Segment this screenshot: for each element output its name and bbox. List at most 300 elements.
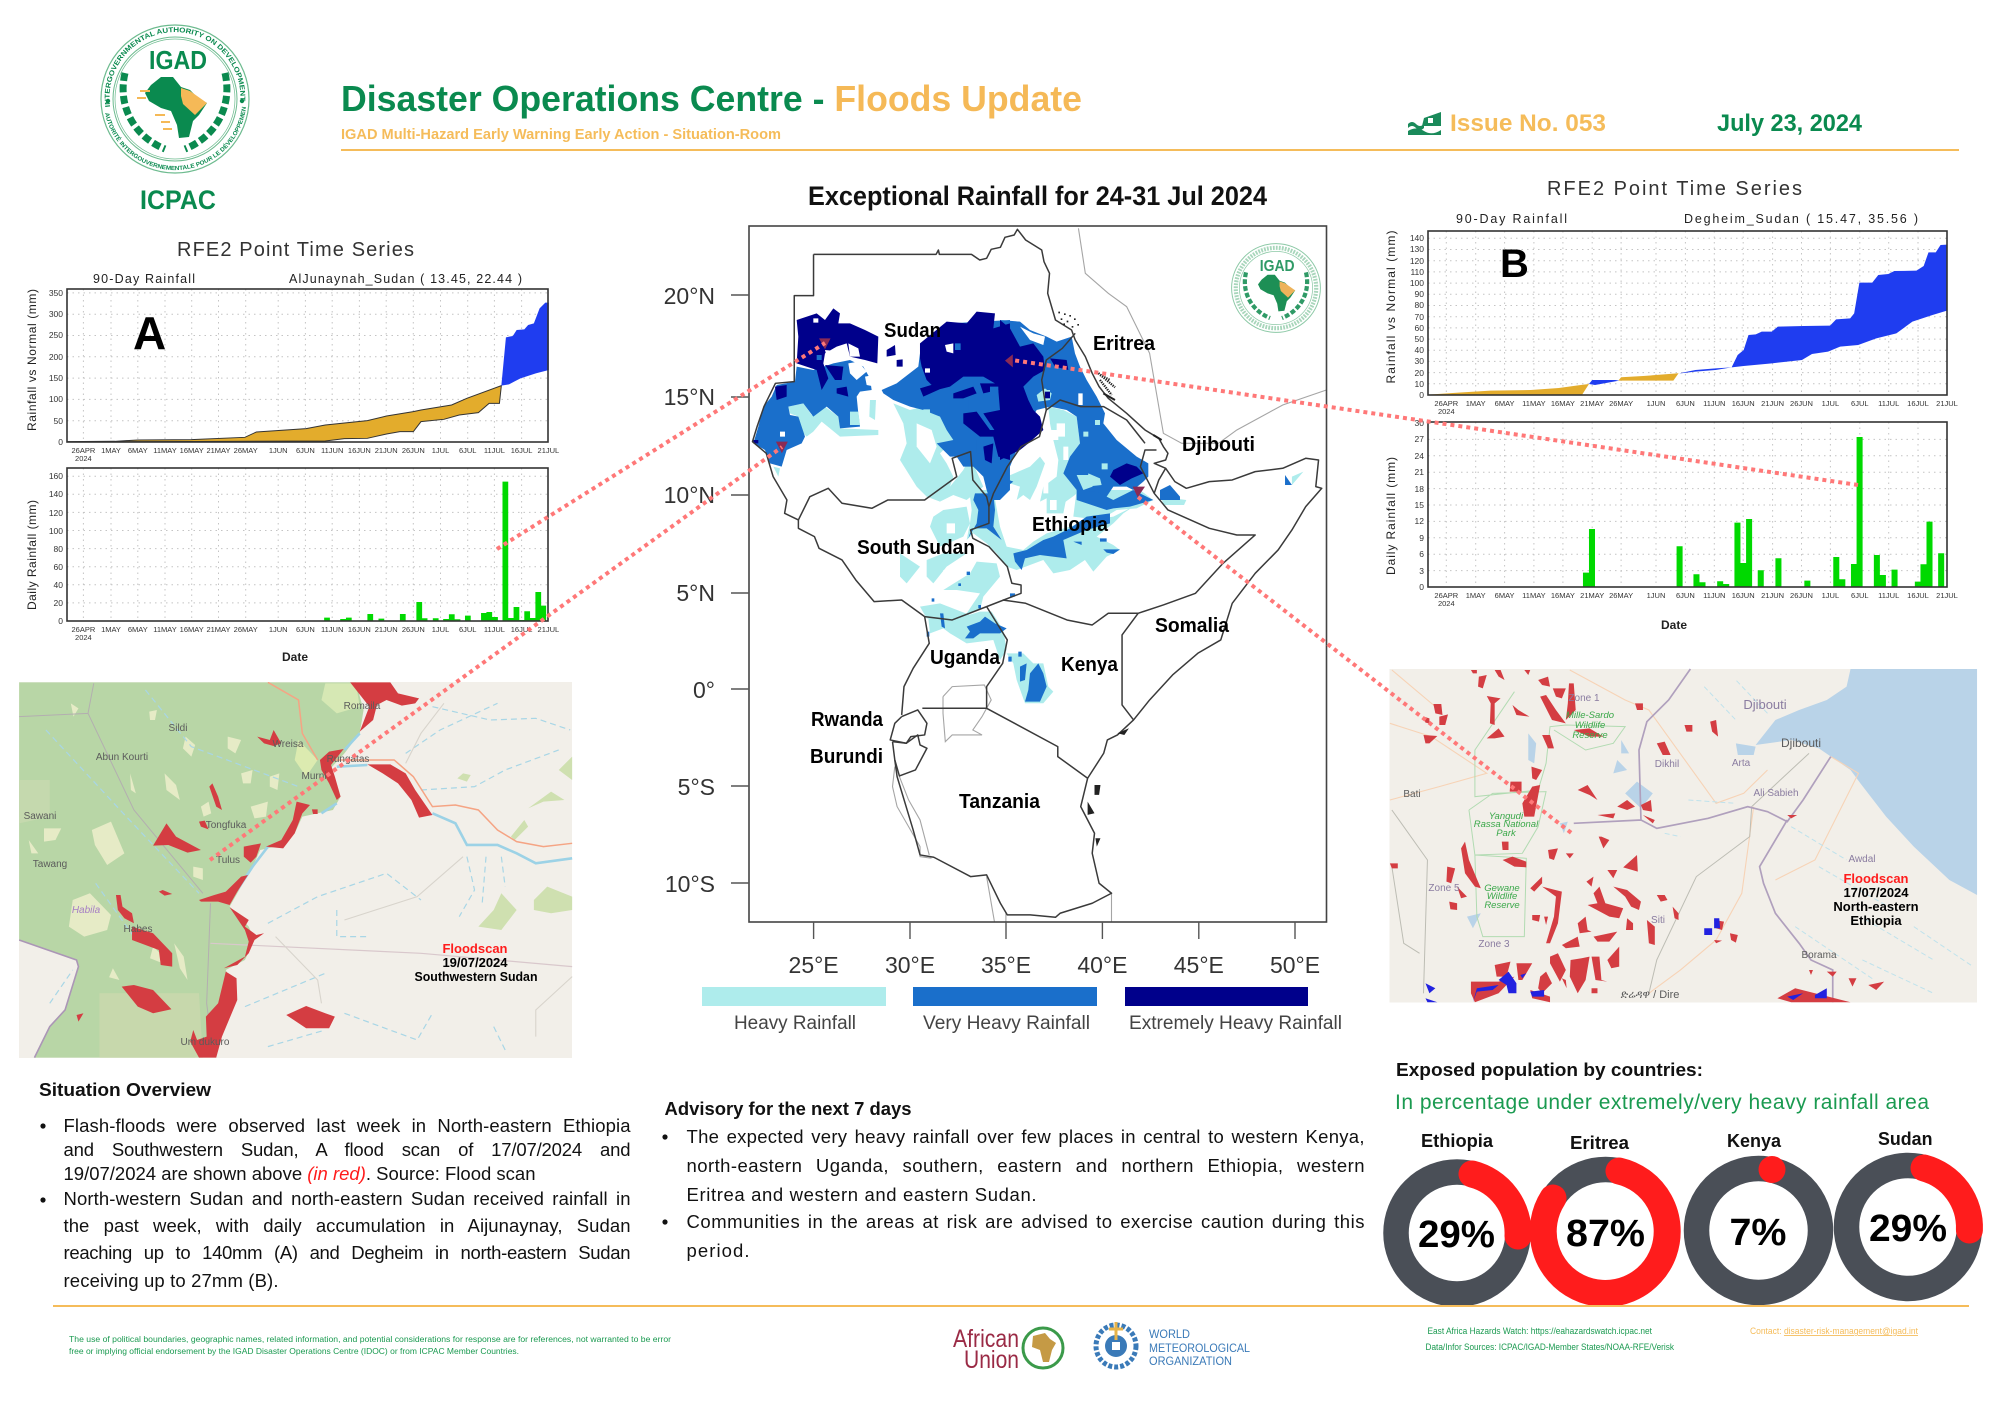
ring text: INTERGOVERNMENTAL AUTHORITY ON DEVELOPMENT xyxy=(104,27,246,107)
footer sources: East Africa Hazards Watch: https://eahazardswatch.icpac.net xyxy=(1428,1326,1653,1336)
chart B subtitle right: Degheim_Sudan ( 15.47, 35.56 ) xyxy=(1684,212,1918,226)
chart A y labels: 300 xyxy=(49,309,63,319)
country labels: Kenya xyxy=(1061,654,1119,676)
chart B x labels: 21JUL xyxy=(1936,399,1958,408)
title: Disaster Operations Centre - Floods Update xyxy=(341,78,1082,119)
text block: advisory: period. xyxy=(686,1240,750,1261)
place labels: Wildlife xyxy=(1575,720,1605,731)
chart A2 y labels: 100 xyxy=(49,526,63,536)
chart A x labels: 6JUL xyxy=(459,446,476,455)
legend: heavy rainfall: Heavy Rainfall xyxy=(734,1013,856,1034)
legend: heavy rainfall xyxy=(702,987,886,1034)
text block: advisory xyxy=(662,1126,1364,1261)
chart B x labels: 11JUL xyxy=(1878,399,1899,408)
chart A date label: Date xyxy=(282,650,308,664)
icon: flood house xyxy=(1408,112,1441,135)
logo: African Union: Union xyxy=(964,1346,1019,1374)
small IGAD logo xyxy=(1232,244,1320,332)
place labels: Siti xyxy=(1651,915,1665,926)
chart A2 x labels: 6JUN xyxy=(296,625,315,634)
chart B y labels: 50 xyxy=(1415,334,1424,344)
flood map B caption xyxy=(1833,871,1919,928)
chart A cumulative areas xyxy=(67,303,549,442)
text block: situation overview: the past week, with daily accumulation in Aijunaynay, Sudan xyxy=(64,1215,630,1236)
chart B x labels: 16MAY xyxy=(1551,399,1575,408)
ICPAC label: ICPAC xyxy=(140,185,216,215)
chart B2 x labels: 16JUN xyxy=(1732,591,1755,600)
text block: situation overview: receiving up to 27mm (B). xyxy=(64,1270,278,1291)
chart A title: RFE2 Point Time Series xyxy=(177,239,414,261)
text block: advisory: north-eastern Uganda, southern, eastern and northern Ethiopia, western xyxy=(686,1155,1364,1176)
place labels: Habila xyxy=(72,905,101,916)
flood map A caption: Southwestern Sudan xyxy=(414,969,538,984)
latitude labels xyxy=(664,283,715,897)
text block: situation overview: 19/07/2024 are shown above (in red). Source: Flood scan xyxy=(64,1163,536,1184)
place labels: Ali Sabieh xyxy=(1753,788,1799,799)
rivers xyxy=(46,690,570,1050)
chart A x labels: 1JUL xyxy=(432,446,449,455)
small IGAD logo: IGAD xyxy=(1260,258,1295,275)
chart B y labels: 110 xyxy=(1410,267,1424,277)
chart B2 y labels: 21 xyxy=(1415,467,1424,477)
chart B2 x labels: 26JUN xyxy=(1790,591,1813,600)
flood map B caption: North-eastern xyxy=(1833,899,1919,914)
chart B2 y labels: 6 xyxy=(1419,549,1424,559)
roads and borders xyxy=(268,682,572,847)
country labels: Eritrea xyxy=(1093,333,1156,355)
donut: Kenya xyxy=(1696,1130,1820,1292)
place labels: Borama xyxy=(1801,950,1837,961)
chart B2 x labels: 16MAY xyxy=(1551,591,1575,600)
chart B2 x labels xyxy=(1434,591,1958,608)
text block: situation overview: and Southwestern Sudan, A flood scan of 17/07/2024 and xyxy=(64,1139,630,1160)
chart A x labels: 21MAY xyxy=(206,446,231,455)
chart B2 x labels: 6JUN xyxy=(1676,591,1695,600)
disclaimer: free or implying official endorsement by the IGAD Disaster Operations Centre (IDOC) or from ICPAC Member Countries. xyxy=(69,1346,519,1356)
chart A2 y labels: 120 xyxy=(49,508,63,518)
longitude labels: 35°E xyxy=(981,952,1031,978)
chart B x labels: 1JUL xyxy=(1822,399,1839,408)
country labels: Somalia xyxy=(1155,615,1230,637)
chart B y labels: 0 xyxy=(1419,390,1424,400)
chart A y labels: 150 xyxy=(49,373,63,383)
place labels: Wreisa xyxy=(273,739,304,750)
place labels xyxy=(1403,693,1876,1001)
place labels: Wildlife xyxy=(1487,891,1517,902)
text block: advisory: Communities in the areas at risk are advised to exercise caution during this xyxy=(686,1211,1364,1232)
latitude labels: 0° xyxy=(693,677,715,703)
flood map B caption: Ethiopia xyxy=(1850,913,1902,928)
chart B cumulative areas xyxy=(1428,245,1947,395)
chart A y labels: 0 xyxy=(58,437,63,447)
chart A2 x labels: 2024 xyxy=(75,633,92,642)
chart B y labels: 120 xyxy=(1410,256,1424,266)
chart A y labels: 250 xyxy=(49,330,63,340)
chart B x labels: 26MAY xyxy=(1609,399,1633,408)
place labels: Zone 3 xyxy=(1478,939,1510,950)
arrow: chart B to Sudan marker xyxy=(1012,360,1858,485)
chart A subtitle left: 90-Day Rainfall xyxy=(93,272,195,286)
subheading: exposed population: In percentage under extremely/very heavy rainfall area xyxy=(1395,1091,1929,1114)
rainfall: extremely heavy layer xyxy=(753,308,1143,485)
chart B subtitle left: 90-Day Rainfall xyxy=(1456,212,1567,226)
chart A x labels: 21JUN xyxy=(375,446,398,455)
country labels: Tanzania xyxy=(959,791,1041,813)
chart B x labels xyxy=(1434,399,1958,416)
chart A2 x labels: 11JUN xyxy=(321,625,343,634)
place labels: Tongfuka xyxy=(206,820,247,831)
place labels: Park xyxy=(1496,828,1517,839)
chart B x labels: 16JUL xyxy=(1907,399,1929,408)
chart A y labels: 100 xyxy=(49,394,63,404)
heading: exposed population: Exposed population by countries: xyxy=(1396,1059,1703,1080)
logo: WMO: WORLD xyxy=(1149,1329,1190,1341)
country labels: Sudan xyxy=(884,320,941,342)
place labels: Habes xyxy=(124,924,152,935)
chart B2 y labels: 24 xyxy=(1415,451,1424,461)
chart A x labels: 16JUN xyxy=(348,446,371,455)
chart B daily bars xyxy=(1583,437,1944,587)
chart A x labels: 6JUN xyxy=(296,446,315,455)
chart B2 y labels xyxy=(1415,418,1424,592)
chart A x labels: 26MAY xyxy=(234,446,258,455)
panel: flood map north-eastern Ethiopia xyxy=(1390,669,1977,1002)
chart B2 x labels: 26MAY xyxy=(1609,591,1633,600)
chart A x labels: 16MAY xyxy=(180,446,204,455)
flood map A caption xyxy=(414,941,538,984)
rainfall: white gaps in heavy layer xyxy=(917,423,1068,580)
text block: situation overview: North-western Sudan and north-eastern Sudan received rainfall in xyxy=(64,1188,630,1209)
chart A x labels xyxy=(72,446,559,463)
chart A2 y labels: 80 xyxy=(54,544,63,554)
rainfall: very heavy layer xyxy=(753,320,1292,702)
chart A x labels: 11JUL xyxy=(484,446,505,455)
chart B x labels: 6MAY xyxy=(1495,399,1515,408)
country labels: Ethiopia xyxy=(1032,514,1109,536)
place labels: Abun Kourti xyxy=(96,752,148,763)
place labels: Um dukuro xyxy=(181,1037,230,1048)
longitude labels: 40°E xyxy=(1077,952,1127,978)
country labels: Uganda xyxy=(930,647,1001,669)
place labels: Awdal xyxy=(1848,854,1876,865)
flood map A caption: Floodscan xyxy=(442,941,508,956)
arrow: flood map A to Sudan marker xyxy=(210,447,782,860)
chart A2 x labels: 16JUN xyxy=(348,625,371,634)
chart A2 x labels: 1MAY xyxy=(101,625,121,634)
chart B y labels: 90 xyxy=(1415,289,1424,299)
place labels: Reserve xyxy=(1484,900,1520,911)
chart B x labels: 11JUN xyxy=(1703,399,1725,408)
chart A2 x labels: 26JUN xyxy=(402,625,425,634)
legend: extremely heavy rainfall: Extremely Heavy Rainfall xyxy=(1129,1013,1342,1034)
chart B2 x labels: 16JUL xyxy=(1907,591,1929,600)
text block: advisory: The expected very heavy rainfall over few places in central to western Kenya, xyxy=(686,1126,1364,1147)
footer sources: Data/Infor Sources: ICPAC/IGAD-Member States/NOAA-RFE/Verisk xyxy=(1426,1342,1675,1352)
arrow: Ethiopia marker to flood map B xyxy=(1138,497,1574,835)
country labels: South Sudan xyxy=(857,537,975,559)
footer contact: Contact: disaster-risk-management@igad.int xyxy=(1750,1326,1919,1336)
disclaimer xyxy=(69,1334,671,1356)
country labels xyxy=(810,320,1255,813)
map title: Exceptional Rainfall for 24-31 Jul 2024 xyxy=(808,181,1267,211)
chart B date label: Date xyxy=(1661,618,1687,632)
chart B2 x labels: 21JUL xyxy=(1936,591,1958,600)
chart A2 y labels: 40 xyxy=(54,580,63,590)
chart B y labels: 30 xyxy=(1415,356,1424,366)
country labels: Rwanda xyxy=(811,709,884,731)
longitude labels: 30°E xyxy=(885,952,935,978)
donut: Ethiopia: 29% xyxy=(1418,1214,1495,1256)
chart A2 x labels: 1JUN xyxy=(269,625,288,634)
chart B2 y labels: 3 xyxy=(1419,566,1424,576)
chart A2 x labels: 26APR xyxy=(72,625,96,634)
chart A2 x labels: 21JUN xyxy=(375,625,398,634)
chart A2 x labels: 1JUL xyxy=(432,625,449,634)
chart B2 y labels: 18 xyxy=(1415,484,1424,494)
arrow: chart A to Sudan marker xyxy=(497,343,825,549)
logo: African Union xyxy=(953,1325,1063,1374)
chart B x labels: 11MAY xyxy=(1522,399,1546,408)
chart A2 y labels: 160 xyxy=(49,471,63,481)
latitude labels: 5°N xyxy=(676,580,715,606)
chart B x labels: 21JUN xyxy=(1761,399,1784,408)
place labels: Yangudi xyxy=(1489,811,1524,822)
chart B y labels: 20 xyxy=(1415,368,1424,378)
chart B2 x labels: 11MAY xyxy=(1522,591,1546,600)
chart B2 x labels: 11JUL xyxy=(1878,591,1899,600)
chart B2 y labels: 12 xyxy=(1415,516,1424,526)
place labels: Gewane xyxy=(1484,883,1520,894)
longitude labels: 25°E xyxy=(789,952,839,978)
heading: advisory: Advisory for the next 7 days xyxy=(664,1098,912,1119)
chart A x labels: 26JUN xyxy=(402,446,425,455)
chart A2 x labels: 16JUL xyxy=(511,625,532,634)
chart B y labels: 10 xyxy=(1415,379,1424,389)
rainfall: heavy layer xyxy=(773,388,1303,703)
chart A2 y labels: 20 xyxy=(54,598,63,608)
legend: very heavy rainfall xyxy=(913,987,1097,1034)
place labels: Dikhil xyxy=(1655,759,1679,770)
chart A2 y labels: 140 xyxy=(49,489,63,499)
chart B x labels: 2024 xyxy=(1438,407,1455,416)
flood extent xyxy=(1390,670,1894,1002)
chart A daily bars xyxy=(297,482,546,621)
chart B x labels: 6JUN xyxy=(1676,399,1695,408)
text block: situation overview xyxy=(40,1115,631,1291)
chart B x labels: 1MAY xyxy=(1466,399,1486,408)
logo: WMO xyxy=(1096,1322,1251,1368)
map ticks xyxy=(731,295,1295,939)
chart B y title: Rainfall vs Normal (mm) xyxy=(1384,230,1398,384)
chart B y labels: 60 xyxy=(1415,323,1424,333)
chart A y labels: 200 xyxy=(49,352,63,362)
donut: Sudan: 29% xyxy=(1869,1208,1947,1250)
chart B x labels: 26APR xyxy=(1434,399,1459,408)
flood extent xyxy=(77,682,432,1058)
place labels: ድሬዳዋ / Dire xyxy=(1621,989,1679,1001)
chart A2 x labels xyxy=(72,625,559,642)
chart A x labels: 26APR xyxy=(72,446,96,455)
footer sources xyxy=(1426,1326,1675,1352)
heading: situation overview: Situation Overview xyxy=(39,1079,212,1100)
chart A x labels: 11JUN xyxy=(321,446,343,455)
chart B x labels: 21MAY xyxy=(1580,399,1604,408)
chart A y title: Rainfall vs Normal (mm) xyxy=(25,289,39,431)
chart B x labels: 1JUN xyxy=(1647,399,1665,408)
logo: WMO: ORGANIZATION xyxy=(1149,1356,1232,1368)
flood map B caption: Floodscan xyxy=(1843,871,1909,886)
logo: WMO: METEOROLOGICAL xyxy=(1149,1343,1251,1355)
place labels: Djibouti xyxy=(1743,697,1787,712)
chart B x labels: 16JUN xyxy=(1732,399,1755,408)
IGAD logo: IGAD xyxy=(149,45,207,75)
chart B x labels: 26JUN xyxy=(1790,399,1813,408)
place labels: Tawang xyxy=(33,859,67,870)
place labels: Mille-Sardo xyxy=(1566,710,1614,721)
chart A y labels: 350 xyxy=(49,288,63,298)
place labels: Romaila xyxy=(344,701,381,712)
chart A2 x labels: 21JUL xyxy=(538,625,559,634)
chart A x labels: 1MAY xyxy=(101,446,121,455)
panel: chart B xyxy=(1384,178,1958,632)
panel: flood map southwestern Sudan xyxy=(19,682,572,1058)
chart A2 x labels: 11MAY xyxy=(153,625,177,634)
place labels: Arta xyxy=(1732,758,1751,769)
place labels: Reserve xyxy=(1572,730,1608,741)
chart B2 x labels: 6JUL xyxy=(1851,591,1869,600)
chart B2 x labels: 21JUN xyxy=(1761,591,1784,600)
donut: Ethiopia: Ethiopia xyxy=(1421,1130,1494,1151)
place labels: Sildi xyxy=(169,723,187,734)
chart B2 x labels: 1JUN xyxy=(1647,591,1665,600)
chart B2 y title: Daily Rainfall (mm) xyxy=(1384,457,1398,575)
panel: rainfall map xyxy=(664,226,1342,1034)
country borders xyxy=(752,228,1326,922)
chart A2 y labels xyxy=(49,471,63,626)
chart A x labels: 1JUN xyxy=(269,446,288,455)
chart A2 y title: Daily Rainfall (mm) xyxy=(25,500,39,610)
place labels: Zone 1 xyxy=(1568,693,1600,704)
flood map A caption: 19/07/2024 xyxy=(442,955,508,970)
chart A2 y labels: 0 xyxy=(58,616,63,626)
place labels: Sawani xyxy=(24,811,56,822)
chart B2 y labels: 30 xyxy=(1415,418,1424,428)
longitude labels: 45°E xyxy=(1174,952,1224,978)
chart B y labels: 80 xyxy=(1415,300,1424,310)
chart A2 y labels: 60 xyxy=(54,562,63,572)
IGAD logo xyxy=(100,24,250,174)
latitude labels: 5°S xyxy=(678,774,715,800)
chart B y labels: 140 xyxy=(1410,233,1424,243)
chart A letter: A xyxy=(133,307,166,359)
place labels: Djibouti xyxy=(1781,736,1821,750)
issue number: Issue No. 053 xyxy=(1450,110,1606,137)
chart A x labels: 2024 xyxy=(75,454,92,463)
chart B2 x labels: 1MAY xyxy=(1466,591,1486,600)
place labels: Rungatas xyxy=(327,754,369,765)
subtitle: IGAD Multi-Hazard Early Warning Early Action - Situation-Room xyxy=(341,127,781,143)
donut: Kenya: 7% xyxy=(1730,1212,1786,1254)
chart B x labels: 6JUL xyxy=(1851,399,1869,408)
date: July 23, 2024 xyxy=(1717,110,1863,137)
disclaimer: The use of political boundaries, geographic names, related information, and potential considerations for response are for references, not warranted to be error xyxy=(69,1334,671,1344)
latitude labels: 10°S xyxy=(665,871,715,897)
chart B y labels: 130 xyxy=(1410,244,1424,254)
donut: Eritrea: 87% xyxy=(1566,1213,1645,1255)
chart B y labels xyxy=(1410,233,1424,400)
text block: advisory: Eritrea and western and eastern Sudan. xyxy=(686,1184,1036,1205)
chart B2 x labels: 11JUN xyxy=(1703,591,1725,600)
chart B2 x labels: 21MAY xyxy=(1580,591,1604,600)
place labels: Murni xyxy=(301,771,327,782)
legend: very heavy rainfall: Very Heavy Rainfall xyxy=(923,1013,1090,1034)
chart A2 x labels: 6JUL xyxy=(459,625,476,634)
place labels: Tulus xyxy=(216,855,240,866)
chart B title: RFE2 Point Time Series xyxy=(1547,178,1802,200)
latitude labels: 20°N xyxy=(664,283,715,309)
donut: Eritrea: Eritrea xyxy=(1570,1132,1630,1153)
text block: situation overview: reaching up to 140mm (A) and Degheim in north-eastern Sudan xyxy=(64,1242,630,1263)
chart B2 x labels: 26APR xyxy=(1434,591,1459,600)
panel: chart A xyxy=(25,239,559,664)
chart A y labels: 50 xyxy=(54,416,63,426)
chart B2 y labels: 27 xyxy=(1415,434,1424,444)
place labels xyxy=(24,701,381,1048)
chart A x labels: 21JUL xyxy=(538,446,559,455)
place labels: Zone 5 xyxy=(1428,883,1460,894)
chart B y labels: 40 xyxy=(1415,345,1424,355)
latitude labels: 15°N xyxy=(664,384,715,410)
donut: Sudan: Sudan xyxy=(1878,1128,1932,1149)
longitude labels xyxy=(789,952,1320,978)
chart B y labels: 100 xyxy=(1410,278,1424,288)
chart A x labels: 11MAY xyxy=(153,446,177,455)
legend: extremely heavy rainfall xyxy=(1125,987,1342,1034)
islands in the Red Sea xyxy=(1058,312,1162,440)
country labels: Djibouti xyxy=(1182,434,1255,456)
red markers xyxy=(776,338,1145,497)
chart A x labels: 16JUL xyxy=(511,446,532,455)
chart B2 x labels: 2024 xyxy=(1438,599,1455,608)
logo: African Union: African xyxy=(953,1325,1019,1353)
rainfall: blocky holes xyxy=(780,318,1108,490)
chart B2 x labels: 1JUL xyxy=(1822,591,1839,600)
place labels: Bati xyxy=(1403,789,1421,800)
chart A y labels xyxy=(49,288,63,447)
chart B2 y labels: 15 xyxy=(1415,500,1424,510)
longitude labels: 50°E xyxy=(1270,952,1320,978)
chart A2 x labels: 16MAY xyxy=(180,625,204,634)
flood map B caption: 17/07/2024 xyxy=(1843,885,1909,900)
chart B y labels: 70 xyxy=(1415,312,1424,322)
roads xyxy=(1390,670,1858,993)
latitude labels: 10°N xyxy=(664,482,715,508)
country labels: Burundi xyxy=(810,746,883,768)
chart B2 x labels: 6MAY xyxy=(1495,591,1515,600)
donut: Kenya: Kenya xyxy=(1727,1130,1782,1151)
chart A2 x labels: 11JUL xyxy=(484,625,505,634)
chart B2 y labels: 9 xyxy=(1419,533,1424,543)
IGAD logo: AUTORITÉ INTERGOUVERNEMENTALE POUR LE DÉVELOPPEMENT xyxy=(105,106,246,170)
chart A x labels: 6MAY xyxy=(128,446,148,455)
place labels: Rassa National xyxy=(1474,819,1539,830)
text block: situation overview: Flash-floods were observed last week in North-eastern Ethiopia xyxy=(64,1115,631,1136)
chart B2 y labels: 0 xyxy=(1419,582,1424,592)
chart A2 x labels: 26MAY xyxy=(234,625,258,634)
chart B letter: B xyxy=(1500,242,1529,286)
donut: Ethiopia xyxy=(1396,1130,1518,1294)
donut: Eritrea xyxy=(1543,1132,1668,1294)
